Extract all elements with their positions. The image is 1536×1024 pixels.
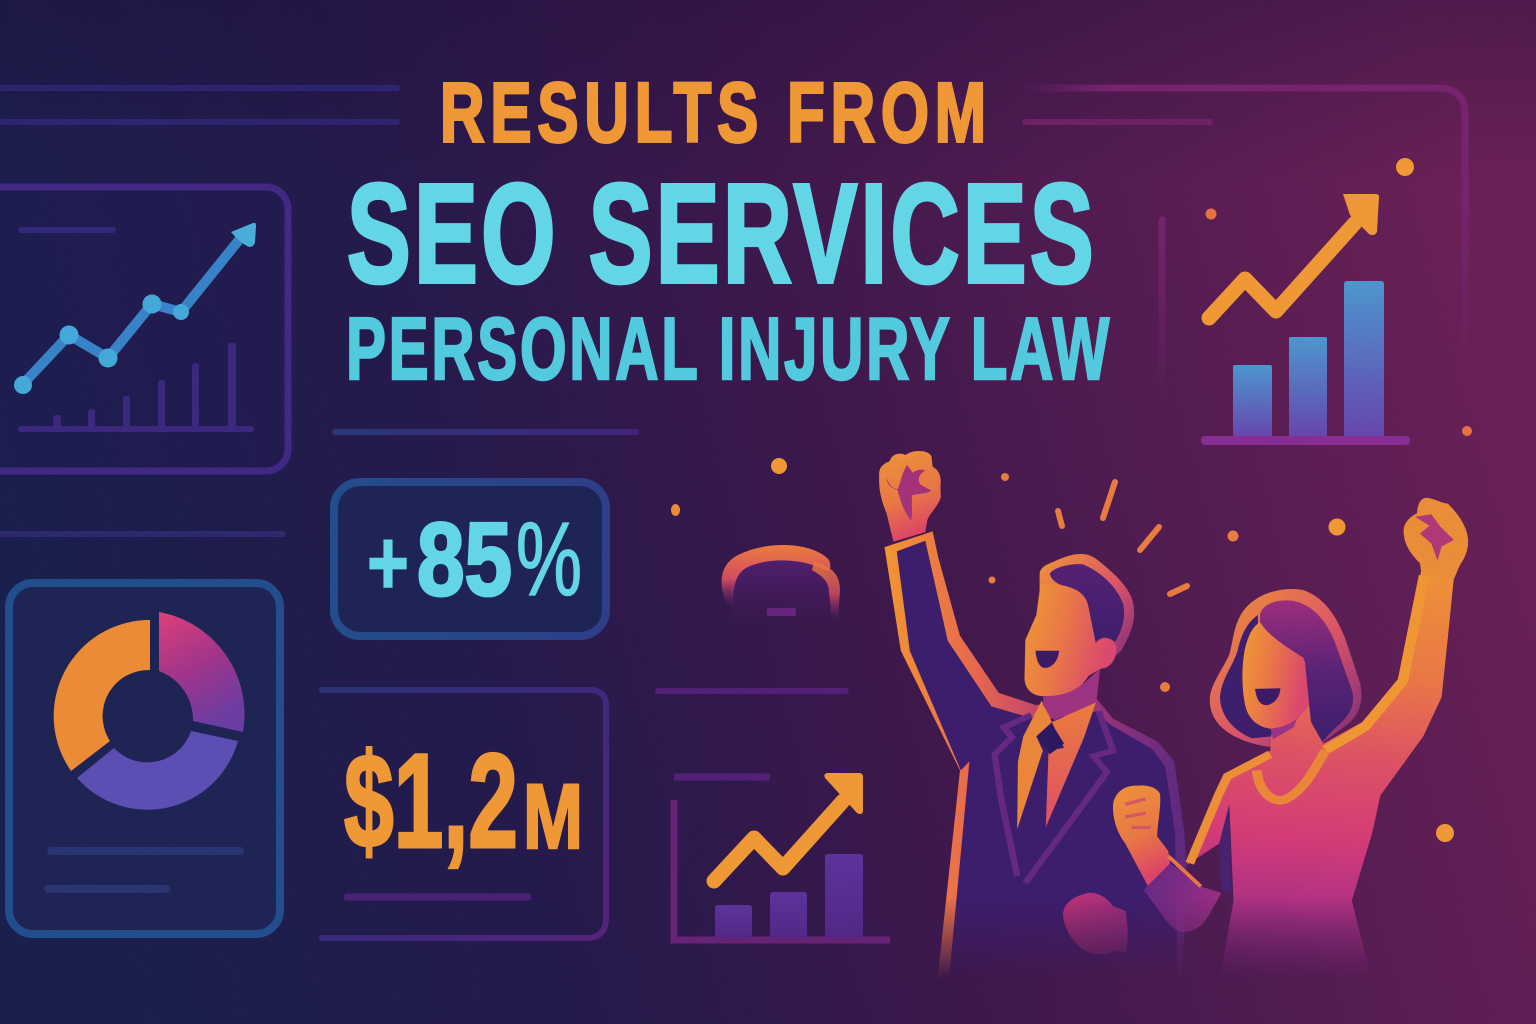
- celebration sparks: [1058, 482, 1187, 594]
- panel: donut chart: [9, 583, 280, 934]
- arm rim: [1325, 576, 1424, 750]
- confetti dots: [671, 158, 1472, 842]
- hair right: [1260, 600, 1353, 743]
- hair rim: [1040, 554, 1134, 665]
- divider above donut: [0, 531, 283, 537]
- arm gap shadow: [1219, 804, 1231, 894]
- header rule lines left: [0, 88, 397, 122]
- stat value: [367, 502, 582, 618]
- illustration: celebrating woman: [1113, 498, 1468, 983]
- title line: seo services: SEO SERVICES: [347, 154, 1097, 312]
- panel: +85% stat: [334, 482, 606, 636]
- title line: personal injury law: PERSONAL INJURY LAW: [346, 299, 1112, 398]
- suit rim: [884, 531, 1187, 979]
- donut segment pink: [159, 612, 245, 732]
- arrow: [714, 801, 843, 881]
- sleeve: [1144, 863, 1221, 932]
- lower fist: [1063, 893, 1128, 954]
- arrow: [1209, 223, 1355, 318]
- panel: line chart: [0, 187, 288, 471]
- stat value: 85: [417, 502, 512, 618]
- data points: [14, 294, 189, 394]
- hair: [1050, 564, 1124, 644]
- lower fist: [1113, 785, 1170, 886]
- neckline: [1257, 751, 1325, 800]
- shirt: [1017, 701, 1052, 829]
- panel: $1,2M stat: [322, 690, 606, 938]
- trend line: [23, 235, 243, 384]
- rule above small chart: [658, 688, 846, 694]
- bars: [715, 905, 752, 938]
- shoulder rim: [1190, 754, 1270, 863]
- mouth: [1255, 688, 1280, 705]
- stat value: $1,2: [344, 727, 518, 876]
- top right bar chart with arrow: [1201, 194, 1410, 445]
- hair rim: [1210, 589, 1361, 747]
- body and raised arm: [1187, 570, 1454, 983]
- donut segment orange: [54, 620, 150, 771]
- neck shadow: [1270, 718, 1298, 740]
- raised fist: [1404, 498, 1468, 579]
- rule above stat: [335, 429, 636, 435]
- caption line: [347, 894, 528, 900]
- stat value: %: [516, 502, 582, 618]
- illustration: celebrating man: [879, 451, 1187, 979]
- faint bars: [18, 343, 254, 432]
- small bar chart with arrow: [674, 773, 890, 940]
- mouth: [1036, 651, 1059, 668]
- bars: [1233, 365, 1272, 439]
- raised fist: [879, 451, 941, 542]
- title line: results from: RESULTS FROM: [440, 66, 992, 160]
- back hair left: [1220, 615, 1272, 738]
- tie: [1036, 724, 1064, 754]
- face: [1242, 622, 1309, 729]
- title: [346, 66, 1112, 398]
- neck: [1043, 669, 1100, 720]
- stat unit: M: [523, 766, 583, 868]
- donut segment purple: [77, 731, 238, 810]
- arrow head: [231, 223, 256, 247]
- icon: helmet shape: [722, 545, 840, 622]
- face: [1024, 585, 1116, 696]
- stat value: +: [367, 512, 409, 614]
- header rule lines and frame right: [1025, 88, 1465, 405]
- suit: [897, 541, 1178, 979]
- caption lines: [48, 851, 240, 889]
- lapels: [995, 711, 1113, 883]
